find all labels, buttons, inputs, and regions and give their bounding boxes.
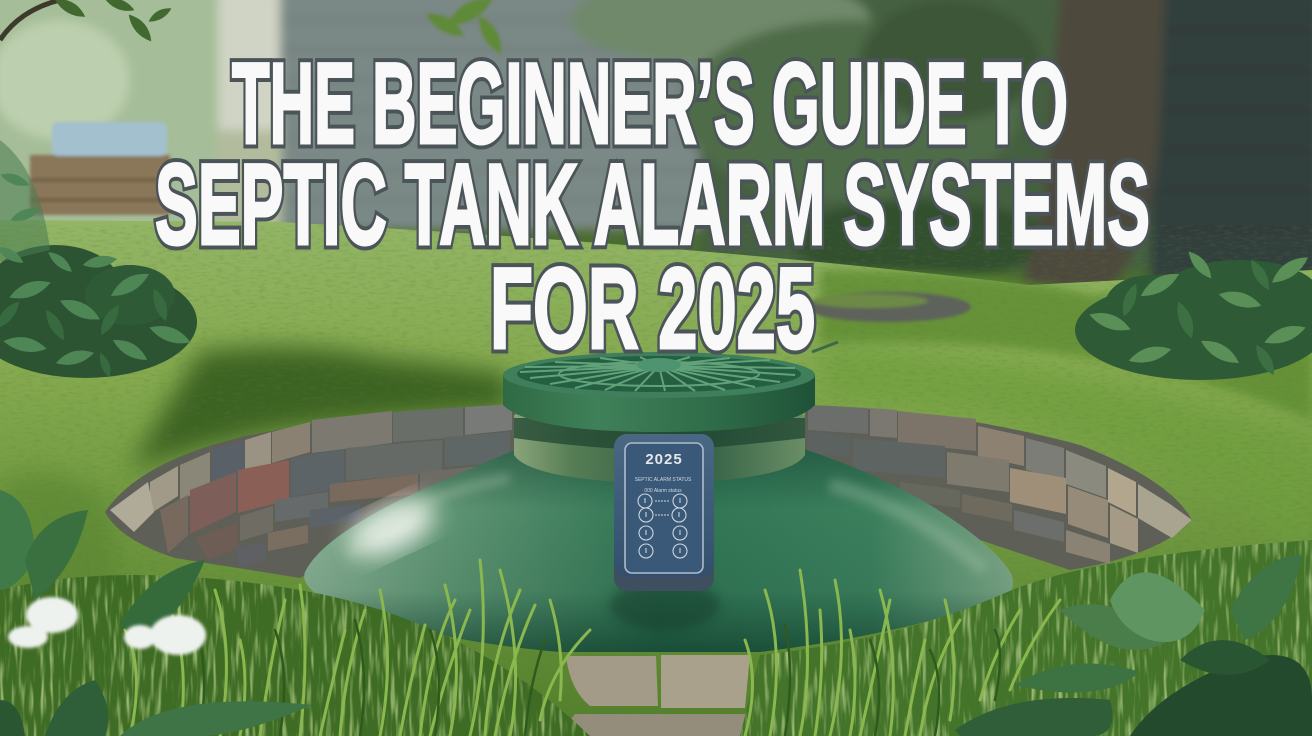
title outline: FOR 2025: [490, 245, 815, 373]
device caption: SEPTIC ALARM STATUS: [635, 477, 692, 483]
title fill: FOR 2025: [490, 245, 815, 373]
device caption: [635, 477, 692, 494]
title fill: [155, 40, 1150, 373]
tank lid with grille: [503, 342, 838, 432]
background: patio bench: [30, 122, 170, 215]
alarm device: [614, 434, 714, 591]
tank neck: [514, 415, 805, 484]
distant stone ring: [805, 292, 971, 322]
left wall stones: [110, 404, 512, 568]
left shrub: [0, 140, 197, 379]
foreground leaves left: [0, 490, 312, 736]
title: [155, 40, 1150, 373]
top foliage and branch: [0, 0, 507, 57]
device caption: 000 Alarm status: [644, 488, 682, 494]
device year: 2025: [645, 451, 683, 468]
right wall stones: [808, 405, 1192, 564]
foreground leaves right: [955, 555, 1312, 736]
retaining wall: [105, 404, 1192, 578]
background: blurred house and trees: [0, 0, 1312, 290]
foreground grass: [0, 540, 1312, 736]
title outline: [155, 40, 1150, 373]
white flowers: [8, 597, 206, 655]
stone pavers: [558, 655, 760, 736]
lawn: [0, 220, 1312, 736]
septic tank dome: [304, 448, 1013, 652]
right shrub: [1075, 248, 1312, 380]
device icons: [638, 494, 687, 558]
